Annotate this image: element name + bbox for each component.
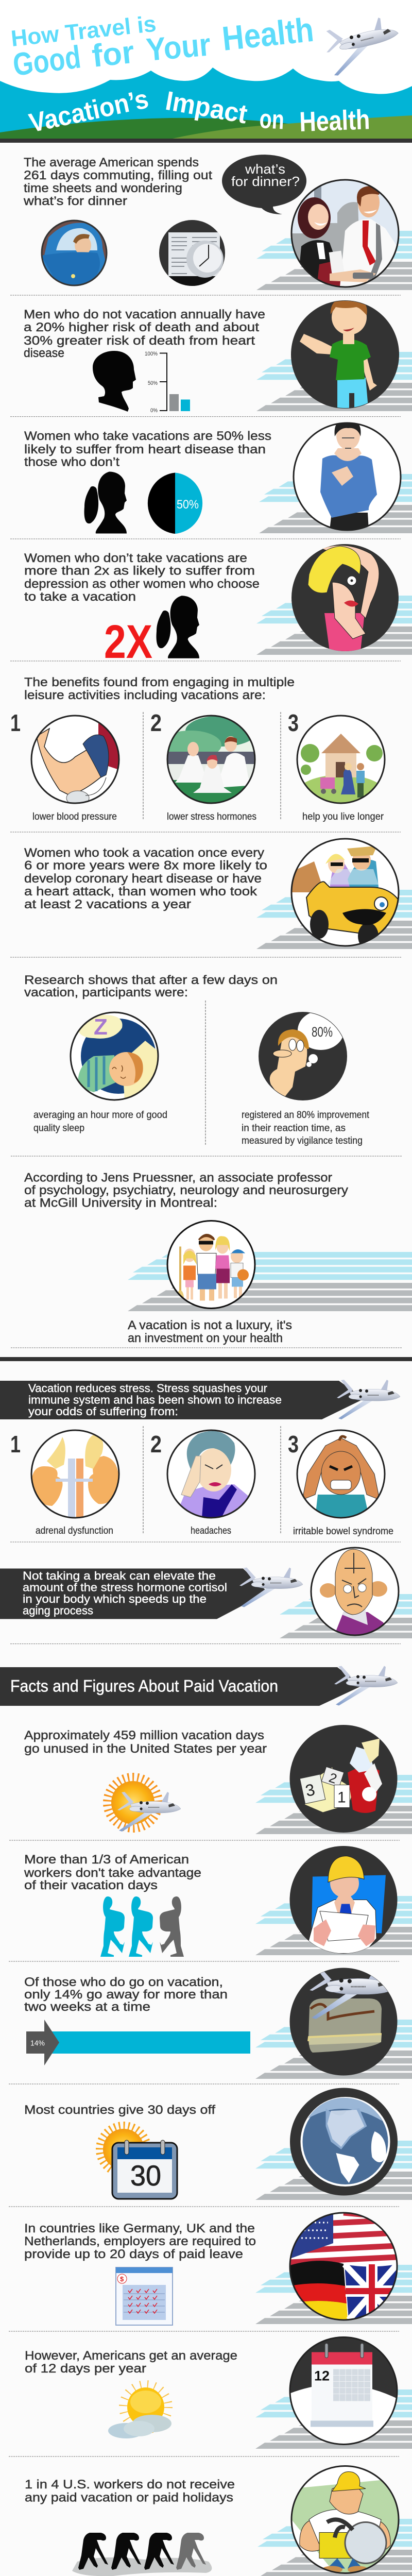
main title: How Travel is — [10, 11, 157, 52]
banner: not taking a break — [0, 1567, 303, 1619]
text: research intro — [24, 973, 278, 999]
icon: stressed blonde woman — [291, 544, 399, 651]
icon: calendar 12: 12 — [314, 2368, 330, 2383]
bar chart: 14 percent arrow: 14% — [30, 2039, 45, 2048]
icon: sleeping child: Z — [94, 1014, 108, 1040]
caption: reaction time: registered an 80% improvement — [242, 1110, 370, 1121]
panel: Americans get 12 days — [25, 2337, 412, 2449]
text: quote — [128, 1318, 292, 1345]
text: heart attack fact: Women who took a vacation once every — [24, 846, 265, 860]
bar chart: risk of death: 100% — [145, 351, 158, 357]
text: depression fact — [24, 551, 260, 604]
text: quote: A vacation is not a luxury, it's — [128, 1318, 292, 1332]
text: men fact: disease — [24, 346, 64, 360]
text: benefits intro: The benefits found from engaging in multiple — [24, 675, 295, 689]
text: heart attack fact: at least 2 vacations a year — [24, 897, 191, 911]
pie chart: 50 percent — [148, 473, 202, 534]
panel: stress — [0, 1380, 400, 1537]
captions — [36, 1526, 393, 1537]
main title: for — [90, 35, 136, 74]
icon: plane and luggage — [289, 1966, 398, 2075]
text: quote attribution: at McGill University in Montreal: — [24, 1196, 217, 1210]
text: heart attack fact: 6 or more years were 8x more likely to — [24, 858, 267, 873]
numbers: 2 — [150, 1431, 162, 1458]
plane in header — [321, 14, 405, 77]
text: heart attack fact: develop coronary heart disease or have — [24, 872, 262, 886]
section title: Health — [299, 104, 370, 138]
text: paid leave: provide up to 20 days of paid leave — [24, 2247, 243, 2261]
text: 30 days: Most countries give 30 days off — [24, 2103, 215, 2117]
text: 1/3 of workers — [24, 1853, 201, 1892]
main title: Health — [220, 10, 315, 58]
icon: flags — [290, 2213, 397, 2320]
caption: reaction time — [242, 1110, 370, 1146]
pie chart: 50 percent: 50% — [177, 498, 199, 512]
main title: Good — [11, 39, 83, 83]
panel: cortisol and aging — [0, 1548, 412, 1638]
icon: trash and calendar pages: 2 — [327, 1770, 339, 1787]
icon: yoga family — [160, 716, 258, 803]
numbers: 3 — [288, 1431, 299, 1458]
icon: woman with headache — [167, 1430, 255, 1518]
text: heart attack fact: a heart attack, than women who took — [24, 885, 258, 899]
text: 14 percent: two weeks at a time — [24, 2000, 150, 2014]
panel: two weeks — [24, 1966, 412, 2079]
callout: what's for dinner: for dinner? — [231, 174, 300, 189]
text: quote attribution — [24, 1171, 349, 1210]
captions: lower stress hormones — [167, 811, 256, 822]
icon: sleeping child — [71, 1012, 158, 1100]
section title: Vacation’s — [26, 84, 151, 139]
text: quote attribution: of psychology, psychiatry, neurology and neurosurgery — [24, 1183, 349, 1197]
numbers — [10, 1431, 299, 1458]
main title — [10, 10, 315, 83]
section title: on — [259, 104, 285, 135]
panel: paid leave in Europe — [24, 2213, 412, 2325]
callout: what's for dinner — [222, 155, 306, 214]
text: 1 in 4 workers — [25, 2478, 235, 2505]
caption: reaction time: measured by vigilance testing — [242, 1136, 363, 1146]
panel: no paid vacation — [25, 2466, 412, 2576]
icon: woman chest pain — [294, 419, 401, 530]
text: 12 days: of 12 days per year — [25, 2362, 146, 2376]
text: 1/3 of workers: workers don't take advantage — [24, 1866, 201, 1880]
stat: 2X in red: 2X — [104, 616, 152, 668]
text: women heart disease fact: those who don’t — [24, 455, 119, 469]
icon: driver in car — [41, 220, 107, 286]
text: 14 percent: only 14% go away for more than — [24, 1988, 228, 2002]
caption: sleep: averaging an hour more of good — [33, 1110, 167, 1121]
caption: sleep — [33, 1110, 167, 1133]
text: women heart disease fact — [24, 429, 271, 469]
panel: commuting — [23, 155, 412, 290]
icon: sun behind cloud — [108, 2384, 171, 2438]
text: commuting fact: time sheets and wondering — [24, 181, 182, 195]
text: paid leave: Netherlands, employers are required to — [24, 2234, 256, 2248]
icon: three walkers, one grey — [100, 1896, 184, 1957]
text: 14 percent: Of those who do go on vacation, — [24, 1975, 223, 1989]
text: benefits intro: leisure activities including vacations are: — [24, 688, 266, 702]
text: women heart disease fact: Women who take vacations are 50% less — [24, 429, 271, 443]
panel: most countries — [24, 2088, 412, 2200]
text: commuting fact: The average American spends — [24, 156, 199, 170]
text: 14 percent — [24, 1975, 228, 2014]
icon: trash and calendar pages: 1 — [337, 1789, 346, 1806]
text: depression fact: more than 2x as likely to suffer from — [24, 564, 255, 578]
panel: benefits of leisure — [10, 675, 385, 822]
text: research intro: vacation, participants were: — [24, 986, 188, 999]
text: men fact: Men who do not vacation annually have — [24, 308, 265, 321]
text: men fact: 30% greater risk of death from heart — [24, 334, 255, 348]
text: 12 days — [25, 2349, 237, 2376]
text: women heart disease fact: likely to suffer from heart disease than — [24, 443, 266, 456]
captions: help you live longer — [302, 811, 384, 822]
section title: Impact — [163, 86, 250, 130]
panel: facts heading — [0, 1666, 398, 1706]
text: commuting fact: what’s for dinner — [23, 194, 127, 208]
text: commuting fact: 261 days commuting, filling out — [24, 168, 212, 182]
text: commuting fact — [23, 156, 212, 208]
text: men fact — [24, 308, 265, 360]
icon: vacationing family — [167, 1221, 255, 1309]
text: depression fact: Women who don’t take vacations are — [24, 551, 247, 565]
captions: adrenal dysfunction — [36, 1526, 113, 1536]
captions — [32, 811, 384, 822]
caption: reaction time: in their reaction time, as — [242, 1123, 346, 1133]
icon: calendar with checkmarks — [116, 2267, 173, 2325]
icon: timesheet and clock — [159, 220, 225, 286]
text: 1/3 of workers: of their vacation days — [24, 1878, 158, 1892]
bar chart: 14 percent arrow — [26, 2020, 250, 2065]
numbers: 1 — [10, 1431, 21, 1458]
text: benefits intro — [24, 675, 295, 702]
text: 1/3 of workers: More than 1/3 of American — [24, 1853, 189, 1867]
text: 1 in 4 workers: any paid vacation or paid holidays — [25, 2490, 233, 2505]
text: 459 million: Approximately 459 million vacation days — [24, 1728, 264, 1742]
text: 459 million: go unused in the United States per year — [24, 1742, 267, 1756]
text: depression fact: depression as other women who choose — [24, 577, 260, 591]
text: 1 in 4 workers: 1 in 4 U.S. workers do not receive — [25, 2478, 235, 2492]
icon: sun and calendar 30: 30 — [130, 2159, 161, 2192]
icon: female silhouette — [84, 472, 127, 534]
icon: trash and calendar pages — [289, 1725, 398, 1833]
text: research intro: Research shows that after a few days on — [24, 973, 278, 987]
icon: calendar 12 — [290, 2337, 397, 2444]
text: 459 million — [24, 1728, 267, 1756]
text: paid leave: In countries like Germany, UK and the — [24, 2222, 255, 2235]
icon: couple in yellow car — [291, 839, 399, 950]
text: quote attribution: According to Jens Pruessner, an associate professor — [24, 1171, 332, 1185]
icon: four workers, one grey — [72, 2533, 212, 2576]
icon: sun and calendar 30 — [100, 2126, 177, 2199]
caption: sleep: quality sleep — [33, 1123, 84, 1133]
icon: blood pressure cuff — [31, 716, 119, 805]
text: men fact: a 20% higher risk of death and about — [24, 320, 259, 334]
text: 12 days: However, Americans get an average — [25, 2349, 237, 2363]
icon: sun and plane — [108, 1778, 181, 1832]
icon: female silhouette — [157, 596, 199, 658]
numbers: 2 — [150, 709, 162, 736]
bar chart: risk of death: 50% — [148, 380, 158, 386]
text: quote: an investment on your health — [128, 1331, 283, 1345]
banner: vacation reduces stress: immune system and has been shown to increase — [28, 1393, 282, 1406]
icon: globe — [290, 2088, 398, 2196]
text: heart attack fact — [24, 846, 267, 911]
captions: headaches — [191, 1526, 231, 1536]
icon: kidneys — [31, 1430, 119, 1518]
section title — [26, 84, 370, 139]
text: depression fact: to take a vacation — [24, 590, 136, 604]
panel: women and heart disease — [24, 419, 412, 534]
icon: male silhouette — [93, 351, 136, 412]
numbers: 3 — [288, 709, 299, 736]
panel: coronary heart disease — [24, 839, 412, 950]
icon: frustrated man — [297, 1430, 385, 1518]
icon: old man — [311, 1548, 399, 1635]
icon: boy waving — [291, 297, 399, 409]
callout: what's for dinner: what’s — [245, 161, 285, 177]
banner: vacation reduces stress: your odds of suffering from: — [28, 1405, 178, 1418]
panel: one third of workers — [24, 1846, 412, 1957]
text: paid leave — [24, 2222, 256, 2261]
icon: thinking man 80 percent — [259, 1011, 347, 1100]
icon: couple in bus — [291, 180, 399, 290]
icon: worker with saw — [291, 2466, 399, 2573]
bar chart: risk of death: 0% — [150, 408, 158, 414]
main title: Your — [145, 27, 212, 68]
icon: engineer reading plans — [289, 1846, 398, 1954]
panel: facts heading: Facts and Figures About Paid Vacation — [10, 1677, 278, 1696]
banner: not taking a break: in your body which speeds up the — [23, 1592, 207, 1605]
panel: men and heart disease — [24, 297, 412, 414]
header: sky, clouds and hills — [0, 0, 412, 143]
panel: women and depression — [24, 544, 412, 668]
icon: thinking man 80 percent: 80% — [312, 1024, 333, 1040]
bar chart: risk of death — [145, 351, 190, 414]
captions: lower blood pressure — [32, 811, 117, 822]
icon: calendar with checkmarks: $ — [120, 2275, 124, 2283]
banner: not taking a break: amount of the stress hormone cortisol — [23, 1581, 227, 1594]
panel: unused days — [24, 1725, 412, 1834]
numbers: 1 — [10, 709, 21, 736]
panel: research findings — [24, 973, 370, 1146]
banner: not taking a break: Not taking a break can elevate the — [23, 1569, 216, 1582]
captions: irritable bowel syndrome — [293, 1526, 393, 1537]
panel: Jens Pruessner quote — [24, 1171, 412, 1345]
numbers — [10, 709, 299, 736]
icon: house and family — [297, 716, 385, 811]
icon: trash and calendar pages: 3 — [304, 1780, 317, 1800]
banner: vacation reduces stress: Vacation reduces stress. Stress squashes your — [28, 1382, 267, 1395]
banner: not taking a break: aging process — [23, 1604, 93, 1617]
banner: vacation reduces stress — [0, 1380, 400, 1419]
